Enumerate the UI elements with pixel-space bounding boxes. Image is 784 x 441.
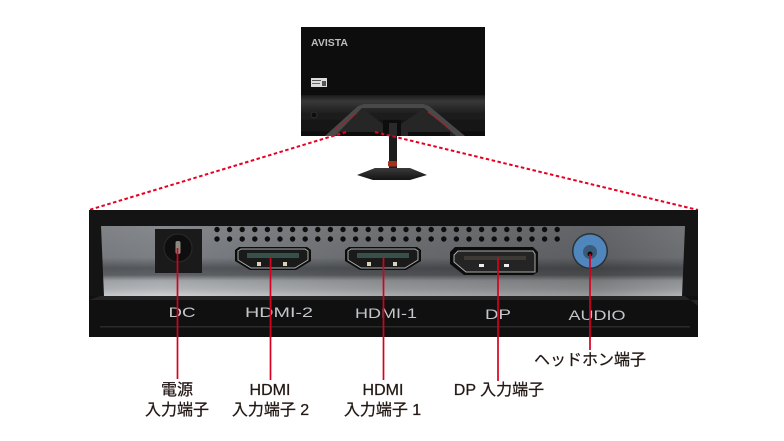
panel text: HDMI-2: HDMI-2 xyxy=(245,304,313,320)
stand red collar xyxy=(388,161,397,166)
label: HDMI input 2: 入力端子 2 xyxy=(232,401,309,419)
stand base xyxy=(357,168,427,180)
monitor back panel xyxy=(301,27,485,97)
mount trim xyxy=(325,104,465,136)
panel text: AUDIO: AUDIO xyxy=(568,307,626,323)
monitor rear view xyxy=(301,27,485,180)
label: power input: 入力端子 xyxy=(145,401,209,419)
leader line: HDMI-1 xyxy=(382,258,384,380)
HDMI-1 port xyxy=(345,247,421,270)
rating label xyxy=(311,78,327,87)
vent holes xyxy=(214,227,560,242)
label: headphone jack: ヘッドホン端子 xyxy=(534,351,646,369)
panel text: DP: DP xyxy=(485,306,511,322)
dotted zoom line left xyxy=(89,132,346,210)
leader line: AUDIO xyxy=(589,254,591,350)
HDMI-2 port xyxy=(235,247,311,270)
AUDIO jack xyxy=(572,233,608,269)
panel: port closeup xyxy=(89,210,698,337)
leader line: HDMI-2 xyxy=(270,258,272,380)
label: HDMI input 2: HDMI xyxy=(250,382,290,399)
label: HDMI input 1: 入力端子 1 xyxy=(344,401,421,419)
monitor lower housing xyxy=(301,95,485,136)
label: HDMI input 1: HDMI xyxy=(363,382,403,399)
panel text: DC: DC xyxy=(168,304,196,320)
stand neck xyxy=(389,125,397,173)
leader line: DC xyxy=(176,248,178,379)
panel body xyxy=(89,210,698,337)
label: DP input: DP 入力端子 xyxy=(454,381,544,399)
power button xyxy=(311,112,317,118)
dotted zoom line right xyxy=(375,132,698,210)
label: power input: 電源 xyxy=(161,382,193,399)
logo: AVISTA: AVISTA xyxy=(311,38,348,49)
panel text: HDMI-1: HDMI-1 xyxy=(355,305,417,321)
DP port xyxy=(450,247,538,275)
metal plate xyxy=(101,226,685,296)
leader line: DP xyxy=(497,257,499,381)
bezel ledge xyxy=(89,296,698,337)
stand bracket xyxy=(383,120,401,136)
DC port xyxy=(155,229,202,273)
